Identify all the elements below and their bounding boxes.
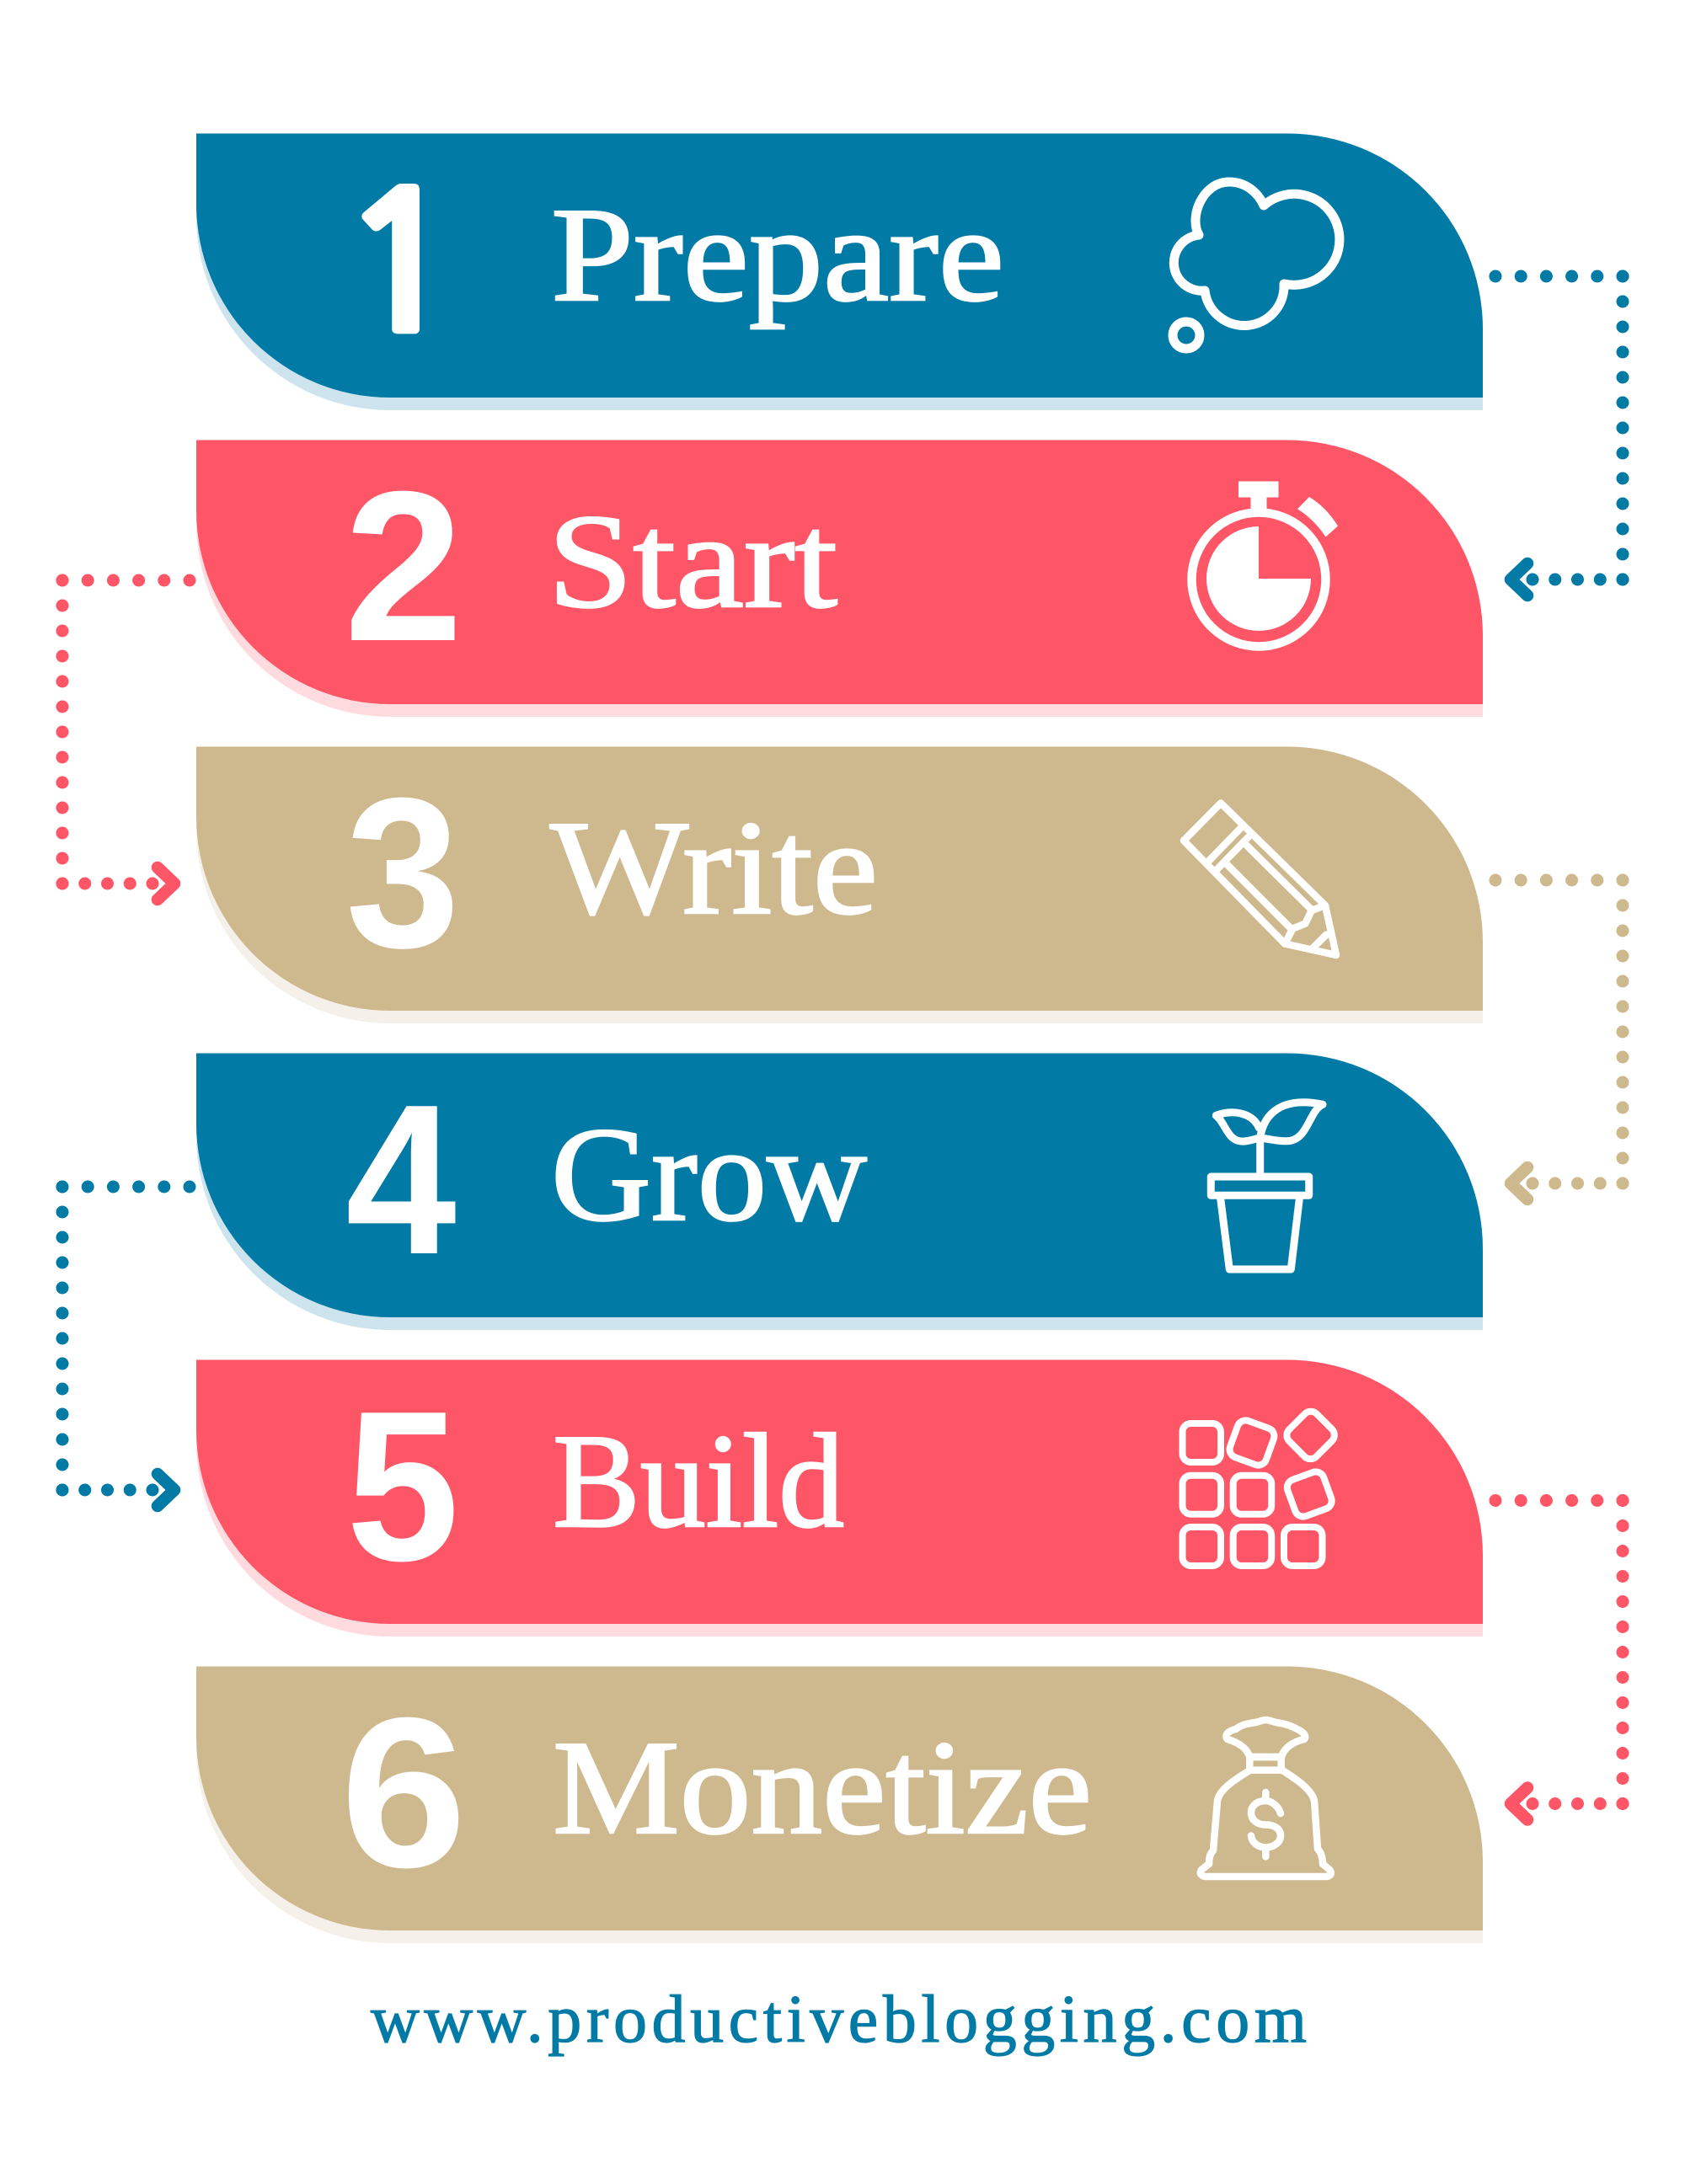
step label: Build	[553, 1406, 844, 1556]
step number 5: 5	[346, 1367, 459, 1605]
panel: step 3 write	[196, 746, 1483, 1023]
step number 4: 4	[345, 1060, 457, 1299]
step label: Write	[550, 793, 878, 942]
step number 3: 3	[345, 753, 460, 992]
panel background	[196, 1053, 1483, 1317]
panel shadow	[196, 1679, 1483, 1943]
arrow: step 2 to step 3	[62, 580, 190, 900]
website url: www.productiveblogging.com	[371, 1983, 1307, 2057]
icon: stopwatch	[1191, 482, 1338, 647]
panel shadow	[196, 453, 1483, 717]
step label: Prepare	[551, 179, 1004, 329]
arrow: step 1 to step 2	[1495, 276, 1623, 595]
arrow: step 4 to step 5	[62, 1187, 190, 1506]
step label: Monetize	[553, 1712, 1092, 1862]
step number 6: 6	[340, 1674, 467, 1912]
panel: step 1 prepare	[196, 133, 1483, 410]
icon: money bag	[1201, 1720, 1331, 1877]
panel background	[196, 746, 1483, 1011]
arrow: step 5 to step 6	[1495, 1501, 1623, 1819]
panel: step 5 build	[196, 1359, 1483, 1637]
icon: pencil	[1184, 804, 1336, 955]
panel shadow	[196, 147, 1483, 410]
step label: Start	[548, 486, 837, 636]
panel background	[196, 1666, 1483, 1930]
panel: step 2 start	[196, 440, 1483, 717]
step label: Grow	[551, 1099, 867, 1249]
panel shadow	[196, 1066, 1483, 1330]
panel background	[196, 1359, 1483, 1624]
panel shadow	[196, 1373, 1483, 1637]
panel: step 6 monetize	[196, 1666, 1483, 1943]
panel shadow	[196, 760, 1483, 1023]
panel background	[196, 133, 1483, 398]
icon: thought cloud	[1173, 182, 1340, 349]
panel background	[196, 440, 1483, 704]
icon: potted plant	[1211, 1103, 1323, 1269]
step number 1: 1	[337, 170, 465, 360]
step number 2: 2	[344, 446, 463, 686]
panel: step 4 grow	[196, 1053, 1483, 1330]
arrow: step 3 to step 4	[1495, 880, 1623, 1199]
icon: building blocks	[1183, 1408, 1338, 1566]
